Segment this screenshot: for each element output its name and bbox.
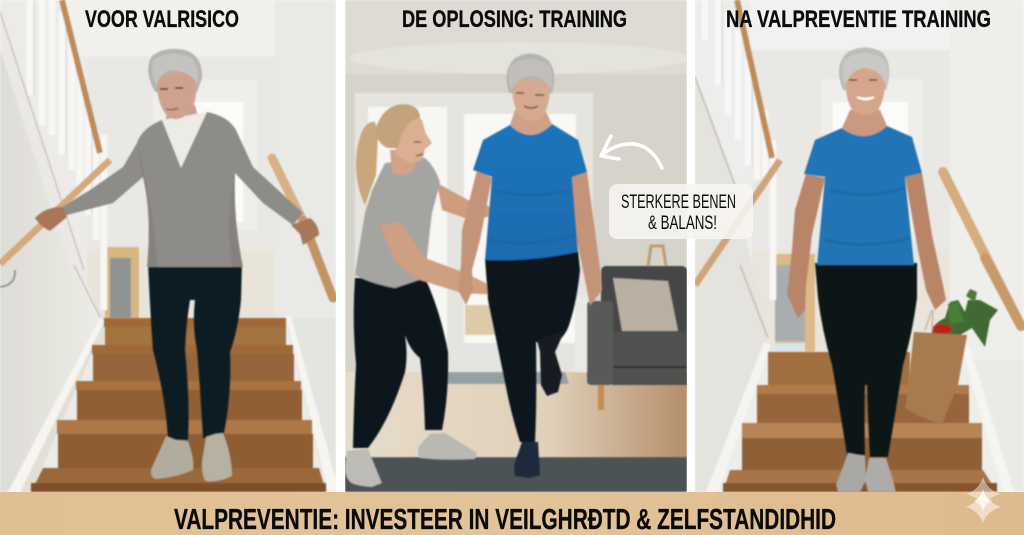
sofa xyxy=(575,266,687,410)
eye and mouth xyxy=(414,142,423,156)
client xyxy=(458,53,602,478)
leggings xyxy=(815,263,917,457)
neck xyxy=(842,110,887,136)
facial features xyxy=(516,93,544,95)
shirt folds xyxy=(825,188,910,245)
hair back xyxy=(148,49,202,92)
standing shoe xyxy=(514,442,540,478)
near arm xyxy=(380,222,498,295)
facial features xyxy=(160,88,183,89)
neck xyxy=(390,150,418,175)
title: VOOR VALRISICO xyxy=(85,6,239,33)
shirt folds xyxy=(488,190,575,243)
smile xyxy=(857,97,874,100)
neck xyxy=(165,104,198,120)
hair xyxy=(375,104,420,148)
scene: staircase hallway xyxy=(695,0,1024,492)
paper bag xyxy=(905,332,967,424)
woman in grey sweater xyxy=(35,49,319,481)
sweater xyxy=(62,112,303,267)
leggings xyxy=(353,278,448,448)
arrow xyxy=(601,136,662,168)
panel: de oplossing training xyxy=(345,0,690,492)
raised foot xyxy=(537,330,565,396)
groceries greens xyxy=(932,289,998,347)
hair fringe xyxy=(842,52,888,86)
face xyxy=(845,68,885,115)
far arm xyxy=(437,183,492,218)
undershirt xyxy=(164,112,206,146)
stairs xyxy=(723,352,997,492)
callout: sterkere benen en balans: & BALANS! xyxy=(648,213,717,234)
shoes xyxy=(345,449,382,487)
eyes xyxy=(849,79,877,81)
panel: voor valrisico xyxy=(0,0,336,492)
shirt xyxy=(804,126,922,265)
stairs xyxy=(31,318,326,492)
woman with groceries xyxy=(787,48,998,492)
arms xyxy=(787,174,825,318)
panel: na valpreventie training xyxy=(695,0,1024,492)
hair back xyxy=(507,53,554,93)
shirt xyxy=(355,158,440,288)
trainer xyxy=(345,53,602,487)
face xyxy=(395,116,432,162)
hair fringe xyxy=(152,53,198,86)
ponytail xyxy=(356,122,378,205)
callout: sterkere benen en balans xyxy=(609,184,753,239)
title: DE OPLOSING: TRAINING xyxy=(402,6,627,33)
sweater shading xyxy=(143,176,243,267)
arms xyxy=(458,170,492,305)
footer banner xyxy=(0,477,1024,535)
face xyxy=(156,72,196,119)
scene: living room xyxy=(345,0,690,492)
hands xyxy=(35,207,67,231)
scene: staircase hallway xyxy=(0,0,336,492)
leggings xyxy=(485,250,580,442)
icon: sparkle xyxy=(966,477,1001,523)
bag handle xyxy=(925,310,933,330)
shirt xyxy=(473,124,587,260)
hair back xyxy=(839,48,889,90)
face xyxy=(512,78,550,121)
neck xyxy=(510,110,552,135)
leggings xyxy=(148,262,242,440)
shoes xyxy=(151,436,193,479)
hair fringe xyxy=(509,59,552,90)
callout: sterkere benen en balans: STERKERE BENEN xyxy=(621,192,736,213)
tomato xyxy=(932,324,952,334)
shoes xyxy=(836,453,866,492)
